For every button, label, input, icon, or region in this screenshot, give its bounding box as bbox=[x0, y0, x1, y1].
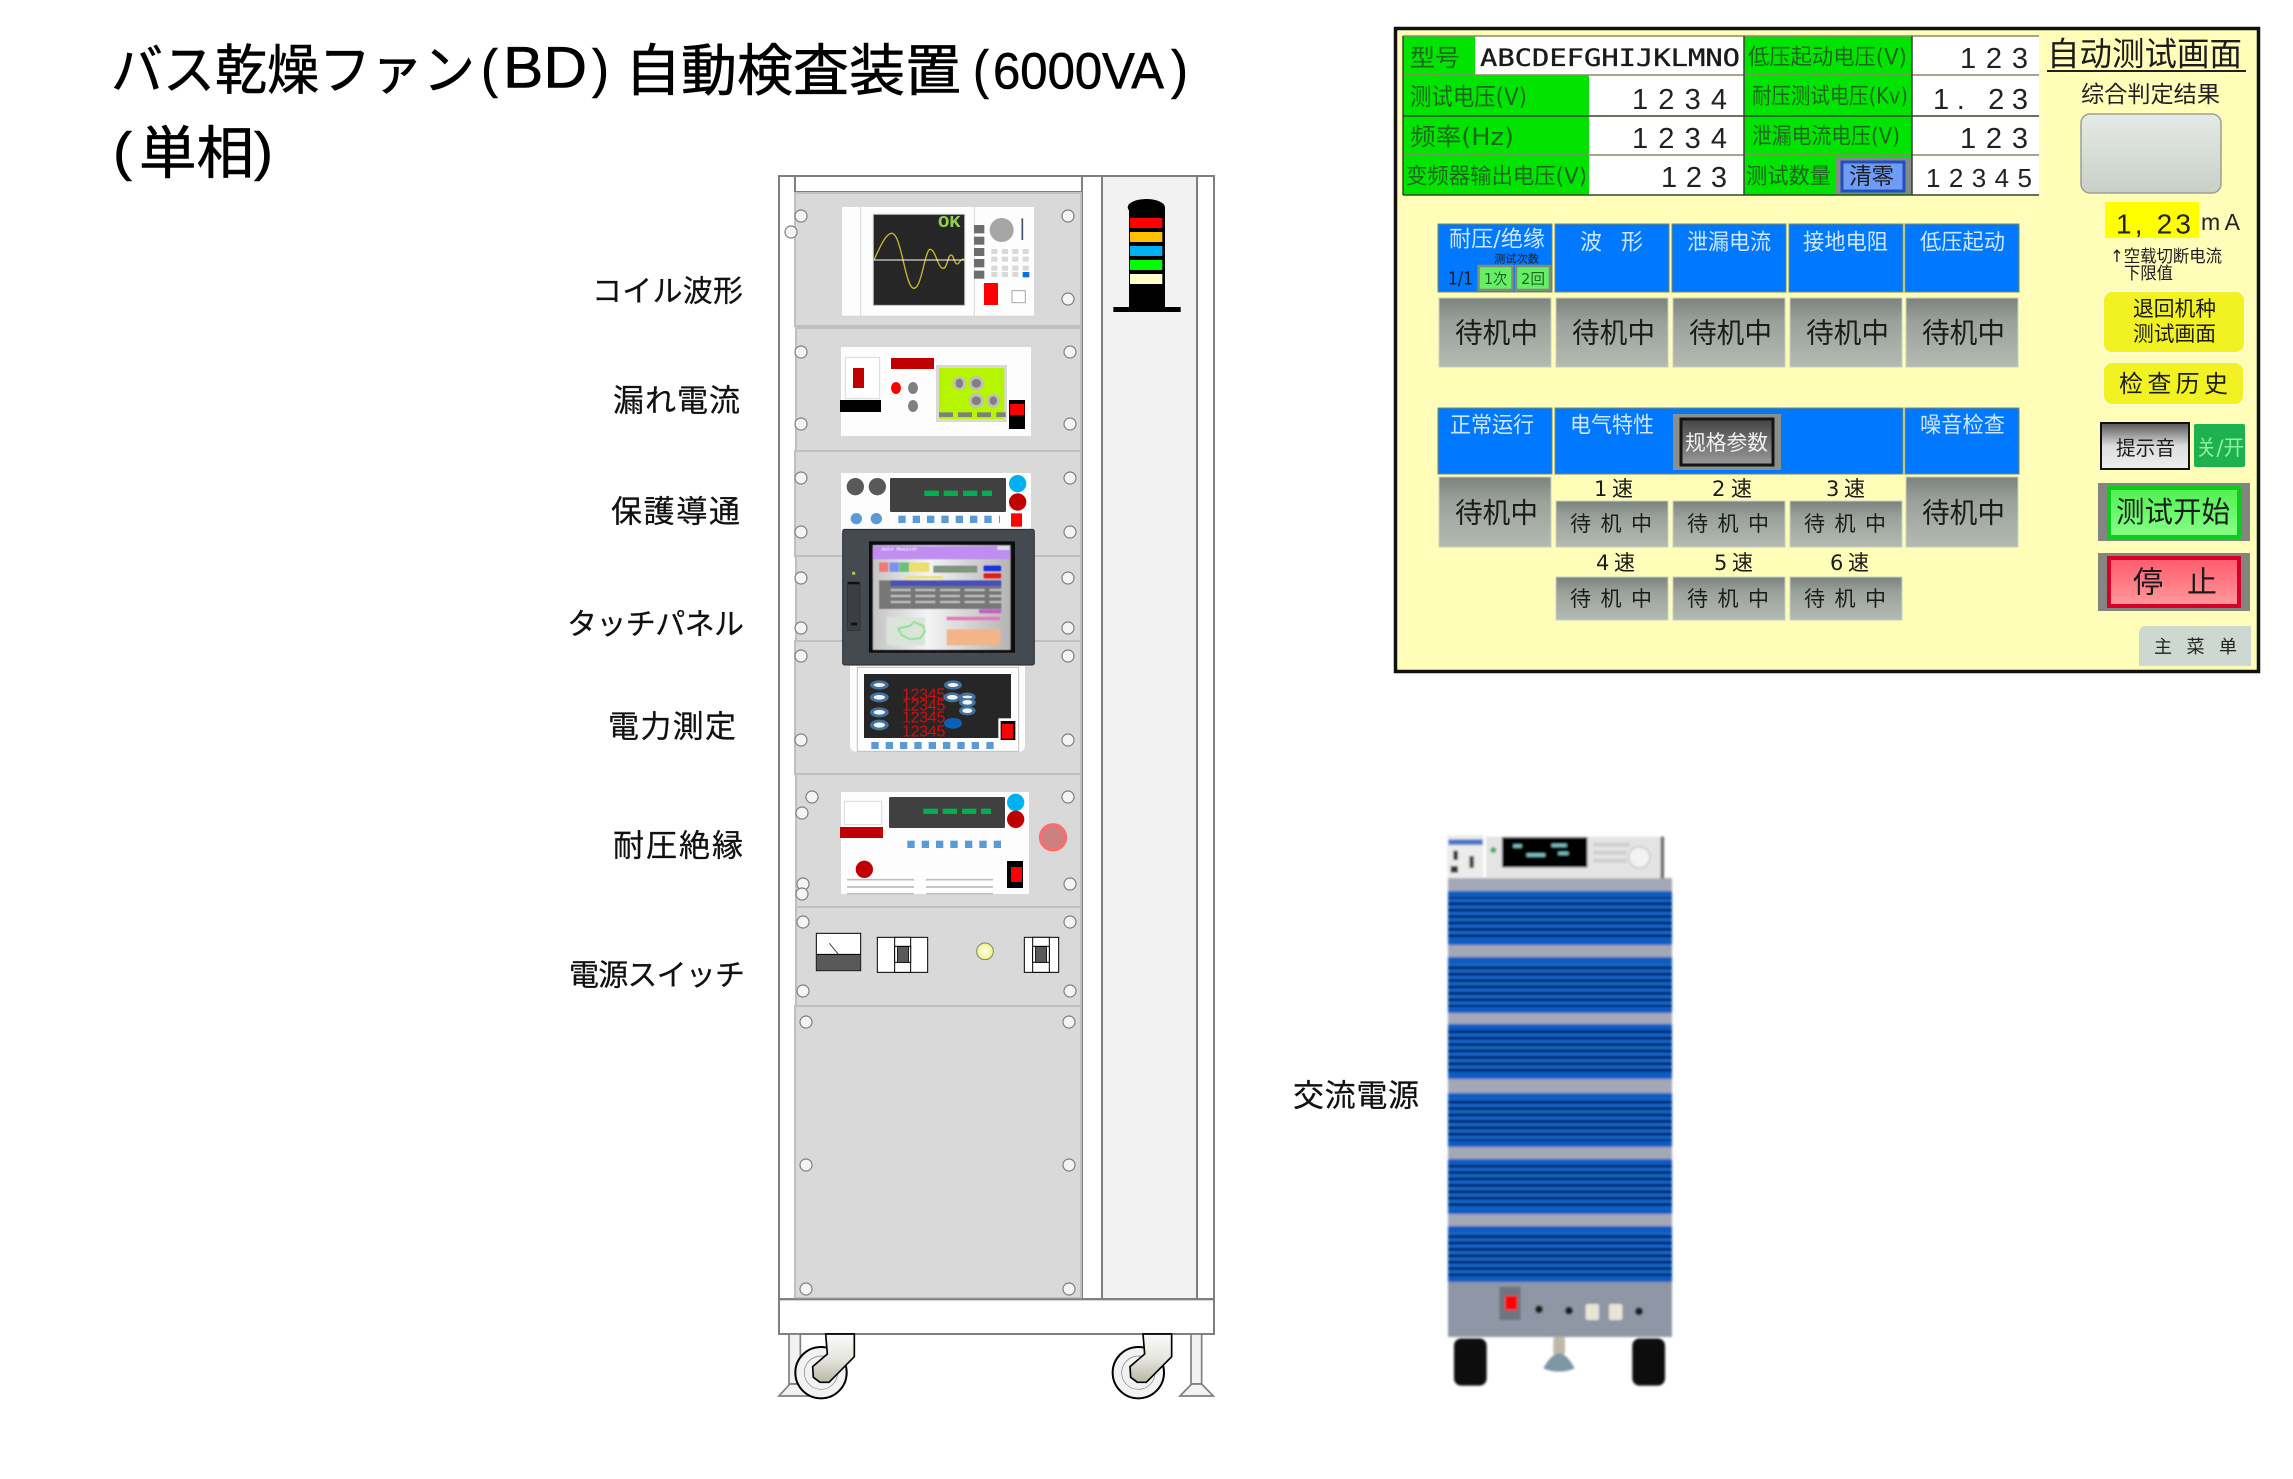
cutoff current value: 下限值 bbox=[2124, 264, 2173, 284]
upper test items: standby status bbox=[1439, 298, 2018, 367]
device: withstand insulation tester bbox=[840, 792, 1066, 894]
title: ) bbox=[592, 39, 609, 99]
button: stop: 停止 bbox=[2133, 566, 2217, 601]
speed labels bbox=[1594, 477, 1869, 575]
rack frame bbox=[779, 176, 1214, 1299]
device: coil waveform tester bbox=[842, 207, 1034, 316]
button: alert sound bbox=[2101, 423, 2189, 469]
device: leakage current tester bbox=[840, 347, 1031, 436]
button: alert sound: 提示音 bbox=[2116, 436, 2175, 460]
upper test items: blue headers: 波形 bbox=[1580, 231, 1643, 256]
panel screws bbox=[785, 210, 1076, 1295]
rack base and casters bbox=[779, 1299, 1214, 1398]
upper test items: standby status: 待机中 bbox=[1572, 317, 1655, 350]
title: ( bbox=[481, 39, 498, 99]
parameter table: 1234 bbox=[1632, 84, 1727, 116]
parameter table: 泄漏电流电压(V) bbox=[1752, 125, 1900, 150]
device: touch panel: Auto Monitor bbox=[882, 546, 918, 552]
button: stop bbox=[2098, 553, 2250, 611]
title: 自動検査装置 bbox=[625, 40, 961, 102]
button: start test: 测试开始 bbox=[2116, 495, 2230, 529]
parameter table: 低压起动电压(V) bbox=[1748, 46, 1907, 71]
speed labels: 3速 bbox=[1826, 477, 1865, 501]
icon: analog meter bbox=[816, 933, 861, 971]
parameter table: 12345 bbox=[1926, 163, 2032, 193]
button: off / on bbox=[2194, 424, 2245, 467]
button: main menu bbox=[2139, 626, 2251, 666]
speed labels: 2速 bbox=[1712, 477, 1752, 501]
lower test items: standby status: 待机中 bbox=[1922, 497, 2005, 530]
device: power meter bbox=[850, 666, 1025, 752]
title: ) bbox=[254, 122, 273, 182]
label: leakage current: 漏れ電流 bbox=[613, 384, 740, 418]
test rack cabinet bbox=[779, 176, 1214, 1398]
button: 1st: 1次 bbox=[1484, 270, 1507, 288]
speed labels: 4速 bbox=[1596, 551, 1635, 575]
button: specification parameters bbox=[1673, 414, 1781, 470]
lower test items: standby status: 待机中 bbox=[1804, 587, 1886, 611]
power supply front stripes bbox=[1448, 878, 1672, 1337]
stack signal tower bbox=[1113, 199, 1181, 312]
title: バス乾燥ファン bbox=[111, 41, 475, 101]
power supply control head bbox=[1447, 835, 1664, 878]
device: power switch panel bbox=[816, 933, 1059, 972]
upper test items: blue headers: 接地电阻 bbox=[1803, 231, 1888, 256]
icon: pilot lamp bbox=[977, 943, 993, 960]
touch screen UI: automatic test screen bbox=[1396, 28, 2258, 672]
label: power switch: 電源スイッチ bbox=[569, 960, 745, 992]
lower test items: standby status bbox=[1439, 477, 2018, 620]
icon: right caster bbox=[1113, 1334, 1172, 1398]
parameter table: ABCDEFGHIJKLMNO bbox=[1480, 44, 1740, 72]
label: withstand insulation: 耐圧絶縁 bbox=[613, 828, 743, 864]
lower test items: blue headers: 电气特性 bbox=[1570, 414, 1654, 439]
parameter table: 耐压测试电压(Kv) bbox=[1752, 85, 1908, 110]
title: ( bbox=[113, 122, 132, 182]
title bbox=[111, 36, 1188, 186]
lower test items: standby status: 待机中 bbox=[1570, 587, 1652, 611]
parameter table: 变频器输出电压(V) bbox=[1406, 165, 1587, 190]
button: start test bbox=[2098, 483, 2250, 541]
button: 2nd: 2回 bbox=[1521, 270, 1545, 288]
button: specification parameters: 规格参数 bbox=[1685, 431, 1768, 455]
device: power meter: 12345 bbox=[902, 686, 945, 703]
lower test items: standby status: 待机中 bbox=[1804, 512, 1886, 536]
device: coil waveform tester: OK bbox=[938, 214, 961, 233]
title: ( bbox=[973, 40, 989, 100]
cutoff current value: 1, 23 bbox=[2116, 209, 2191, 240]
title: ) bbox=[1171, 40, 1188, 100]
device: power meter: 12345 bbox=[902, 723, 945, 740]
button: off / on: 关/开 bbox=[2196, 436, 2244, 460]
parameter table: 测试电压(V) bbox=[1410, 83, 1527, 111]
parameter table: 123 bbox=[1960, 43, 2028, 75]
icon: main breaker bbox=[877, 937, 928, 972]
upper test items: blue headers: 泄漏电流 bbox=[1687, 231, 1771, 256]
screen title: 自动测试画面 bbox=[2047, 35, 2242, 74]
upper test items: standby status: 待机中 bbox=[1922, 317, 2005, 350]
lower test items: blue headers: 噪音检查 bbox=[1920, 414, 2005, 439]
label: AC power supply: 交流電源 bbox=[1293, 1078, 1419, 1114]
device: power meter: 12345 bbox=[902, 709, 945, 726]
upper test items: standby status: 待机中 bbox=[1806, 317, 1889, 350]
label: power measurement: 電力測定 bbox=[608, 710, 736, 744]
button: 1st bbox=[1478, 266, 1512, 290]
power supply lower controls and casters bbox=[1454, 1287, 1665, 1386]
device: touch panel bbox=[843, 529, 1034, 665]
upper test items: blue headers: 低压起动 bbox=[1920, 231, 2005, 256]
device: power meter: 12345 bbox=[902, 697, 945, 714]
title: 6000VA bbox=[993, 42, 1164, 100]
AC power supply unit bbox=[1447, 835, 1672, 1386]
overall judgement: 综合判定结果 bbox=[2081, 81, 2220, 107]
parameter table bbox=[1403, 36, 2039, 195]
overall judgement bbox=[2081, 81, 2221, 193]
lower test items: standby status: 待机中 bbox=[1570, 512, 1652, 536]
title: BD bbox=[503, 36, 587, 100]
parameter table: 1234 bbox=[1632, 123, 1727, 155]
lower test items: blue headers bbox=[1438, 408, 2019, 474]
lower test items: standby status: 待机中 bbox=[1687, 512, 1769, 536]
upper test items: blue headers: 测试次数 bbox=[1494, 253, 1539, 266]
cutoff current value: ↑空载切断电流 bbox=[2110, 247, 2222, 267]
speed labels: 1速 bbox=[1594, 477, 1633, 501]
button: back to model test screen bbox=[2103, 291, 2245, 353]
label: coil waveform: コイル波形 bbox=[592, 276, 743, 308]
lower test items: blue headers: 正常运行 bbox=[1450, 414, 1534, 439]
button: back to model test screen: 退回机种 bbox=[2133, 297, 2216, 321]
parameter table: 测试数量 bbox=[1746, 165, 1831, 190]
button: inspection history: 检查历史 bbox=[2119, 370, 2228, 398]
rack panels bbox=[795, 193, 1081, 1298]
parameter table: 频率(Hz) bbox=[1410, 123, 1514, 151]
label: protective conduction: 保護導通 bbox=[611, 494, 740, 530]
screen background bbox=[1396, 28, 2258, 672]
button: 2nd bbox=[1516, 266, 1550, 290]
upper test items: standby status: 待机中 bbox=[1689, 317, 1772, 350]
cutoff current value bbox=[2105, 202, 2241, 284]
icon: secondary breaker bbox=[1024, 937, 1059, 972]
parameter table: 型号 bbox=[1410, 44, 1460, 72]
button: inspection history bbox=[2103, 362, 2244, 405]
button: clear count bbox=[1836, 158, 1911, 194]
speed labels: 5速 bbox=[1714, 551, 1753, 575]
icon: left caster bbox=[795, 1334, 854, 1398]
label: touch panel: タッチパネル bbox=[567, 608, 744, 642]
parameter table: 1. 23 bbox=[1933, 84, 2028, 116]
parameter table: 123 bbox=[1661, 162, 1727, 194]
button: clear count: 清零 bbox=[1849, 164, 1894, 190]
parameter table: 123 bbox=[1960, 123, 2028, 155]
lower test items: standby status: 待机中 bbox=[1455, 497, 1538, 530]
button: back to model test screen: 测试画面 bbox=[2133, 322, 2216, 346]
button: main menu: 主菜单 bbox=[2154, 637, 2237, 657]
title: 単相 bbox=[139, 122, 254, 186]
lower test items: standby status: 待机中 bbox=[1687, 587, 1769, 611]
upper test items: blue headers: 1/1 bbox=[1448, 269, 1473, 290]
upper test items: standby status: 待机中 bbox=[1455, 317, 1538, 350]
device: protective conduction tester bbox=[841, 473, 1031, 533]
cutoff current value: mA bbox=[2201, 209, 2241, 235]
speed labels: 6速 bbox=[1830, 551, 1869, 575]
upper test items: blue headers: 耐压/绝缘 bbox=[1449, 228, 1545, 253]
upper test items: blue headers bbox=[1438, 224, 2019, 292]
